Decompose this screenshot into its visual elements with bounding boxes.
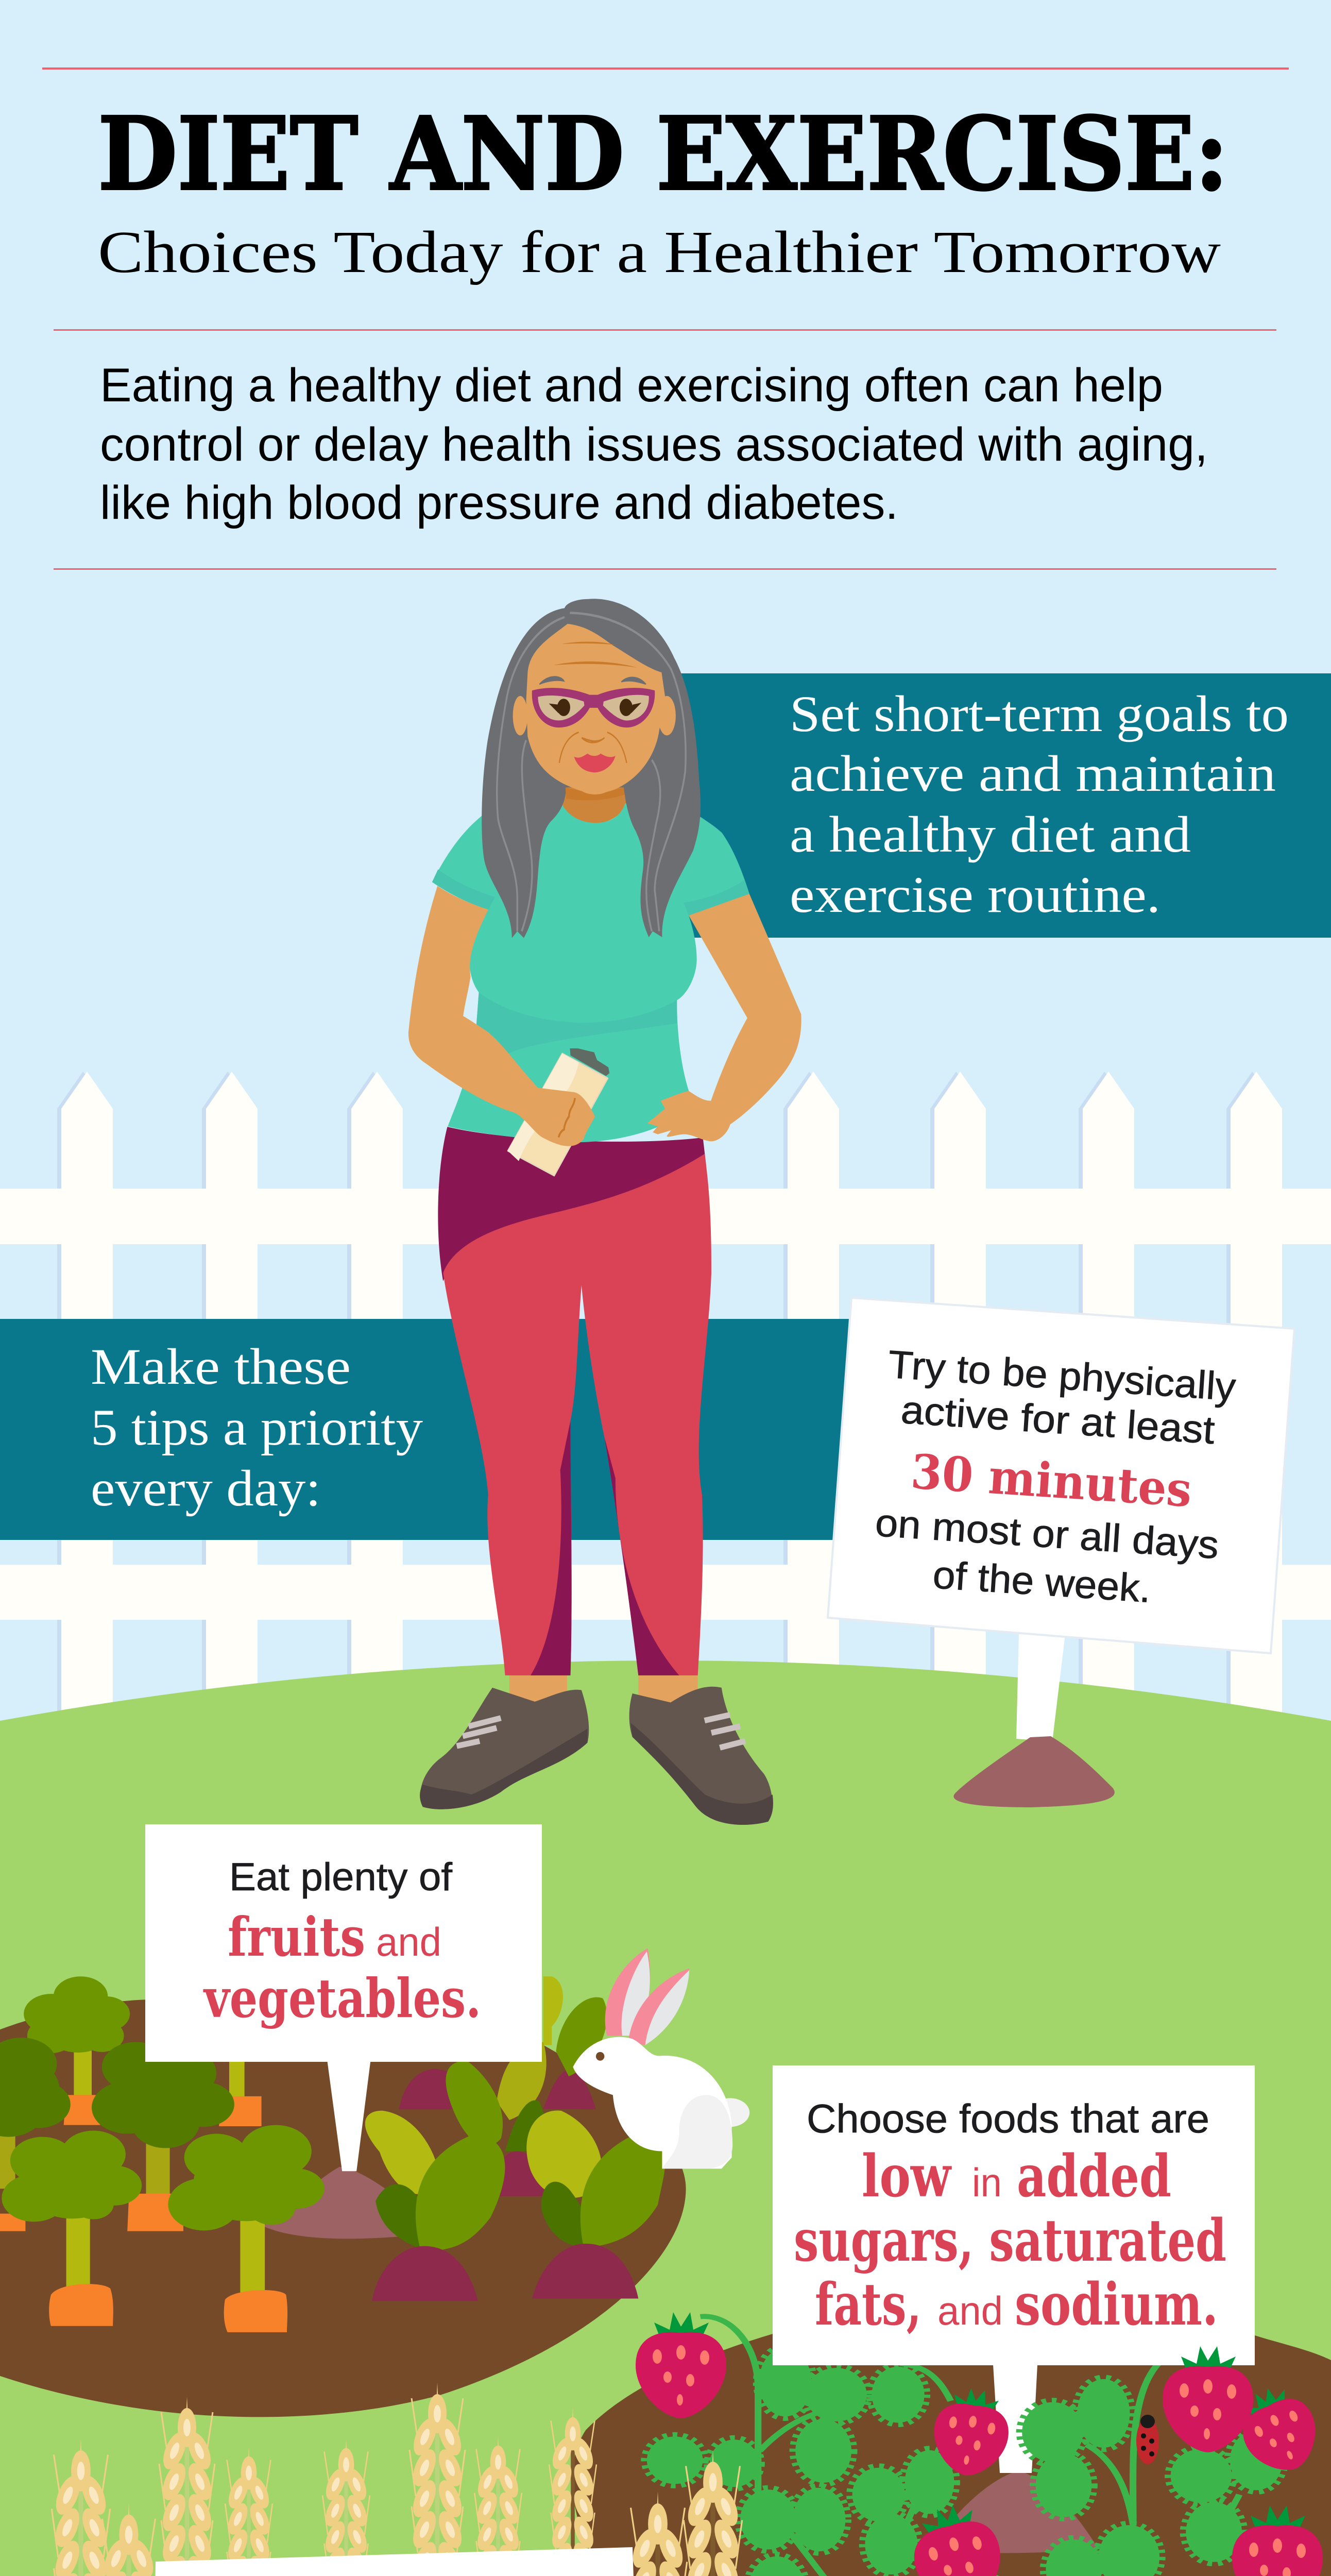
teal banner: short-term goals: a healthy diet and (790, 806, 1191, 863)
right arm and hand (647, 894, 801, 1141)
sign: 30 minutes: of the week. (931, 1553, 1152, 1611)
strawberry plants (636, 2312, 1330, 2576)
intro paragraph: control or delay health issues associated with aging, (100, 418, 1208, 471)
background sky (0, 0, 1331, 1752)
fist (514, 1088, 595, 1146)
icon: front carrots (2, 2125, 325, 2332)
icon: back row carrots (0, 1976, 262, 2231)
sign: low added sugars, fats, sodium: low (862, 2143, 952, 2210)
glasses (532, 688, 655, 727)
icon: strawberry stems (701, 2316, 1239, 2576)
upper body (408, 599, 801, 1176)
title block: Choices Today for a Healthier Tomorrow (98, 219, 1221, 285)
icon: strawberry over sign (1163, 2346, 1253, 2452)
neck (562, 786, 626, 824)
icon: strawberry leaves (647, 2348, 1283, 2576)
sign: 30 minutes: active for at least (900, 1388, 1216, 1452)
hair (482, 599, 701, 938)
icon: back row beets (399, 1976, 607, 2196)
sign: fruits and vegetables: Eat plenty of (229, 1855, 453, 1899)
teal banner: short-term goals (618, 673, 1331, 938)
icon: rabbit (573, 1948, 749, 2168)
wheat stalks, back row (16, 2383, 757, 2576)
icon: front beets (368, 2112, 663, 2301)
teal banner: five tips: Make these (91, 1338, 351, 1395)
sign: low added sugars, fats, sodium: in (972, 2160, 1002, 2205)
teal banner: short-term goals: exercise routine. (790, 866, 1161, 923)
mound and post: strawberries sign (930, 2365, 1098, 2553)
title block: DIET AND EXERCISE: (98, 95, 1228, 213)
sign: fruits and vegetables (145, 1824, 542, 2062)
sign: low added sugars, fats, sodium: fats, (815, 2271, 922, 2338)
icon: ladybug (1136, 2415, 1159, 2464)
soil bed: vegetables (0, 1999, 686, 2417)
teal banner: five tips: every day: (91, 1460, 321, 1517)
teal shirt (432, 803, 749, 1142)
intro paragraph: like high blood pressure and diabetes. (100, 477, 898, 529)
mound and post (263, 2058, 441, 2239)
sign: fruits and vegetables: vegetables. (203, 1967, 481, 2030)
wheat ears (22, 2383, 523, 2576)
sign: fruits and vegetables: and (376, 1919, 441, 1964)
vegetable garden (0, 1976, 663, 2332)
green hill (0, 1660, 1331, 2576)
sign: 30 minutes: Try to be physically (887, 1343, 1237, 1409)
sign: low added sugars, fats, sodium: and (937, 2288, 1003, 2333)
sign: low added sugars, fats, sodium: added (1017, 2143, 1171, 2210)
face (526, 624, 665, 794)
sign: low added sugars, fats, sodium (773, 2065, 1255, 2365)
intro paragraph (54, 359, 1276, 570)
teal banner: short-term goals: achieve and maintain (790, 745, 1276, 802)
sign: whole grains and protein (151, 2547, 643, 2576)
leggings and shoes (420, 1127, 773, 1825)
sign: 30 minutes: on most or all days (874, 1501, 1220, 1567)
sign: 30 minutes: 30 minutes (909, 1444, 1193, 1518)
intro paragraph: Eating a healthy diet and exercising often can help (100, 359, 1163, 412)
sign: 30 minutes (828, 1298, 1294, 1807)
sign: low added sugars, fats, sodium: sodium. (1015, 2271, 1218, 2338)
water bottle (570, 1048, 609, 1076)
teal banner: five tips (0, 1319, 876, 1540)
soil bed: strawberries (572, 2334, 1331, 2576)
icon: strawberries (636, 2312, 1330, 2576)
white picket fence (0, 1072, 1331, 1741)
title block (42, 67, 1289, 331)
left arm (408, 886, 538, 1118)
teal banner: short-term goals: Set short-term goals to (790, 685, 1289, 742)
teal banner: five tips: 5 tips a priority (91, 1399, 423, 1456)
woman holding water bottle (408, 599, 801, 1825)
sign: fruits and vegetables: fruits (228, 1905, 365, 1969)
sign: low added sugars, fats, sodium: Choose foods that are (807, 2096, 1209, 2141)
